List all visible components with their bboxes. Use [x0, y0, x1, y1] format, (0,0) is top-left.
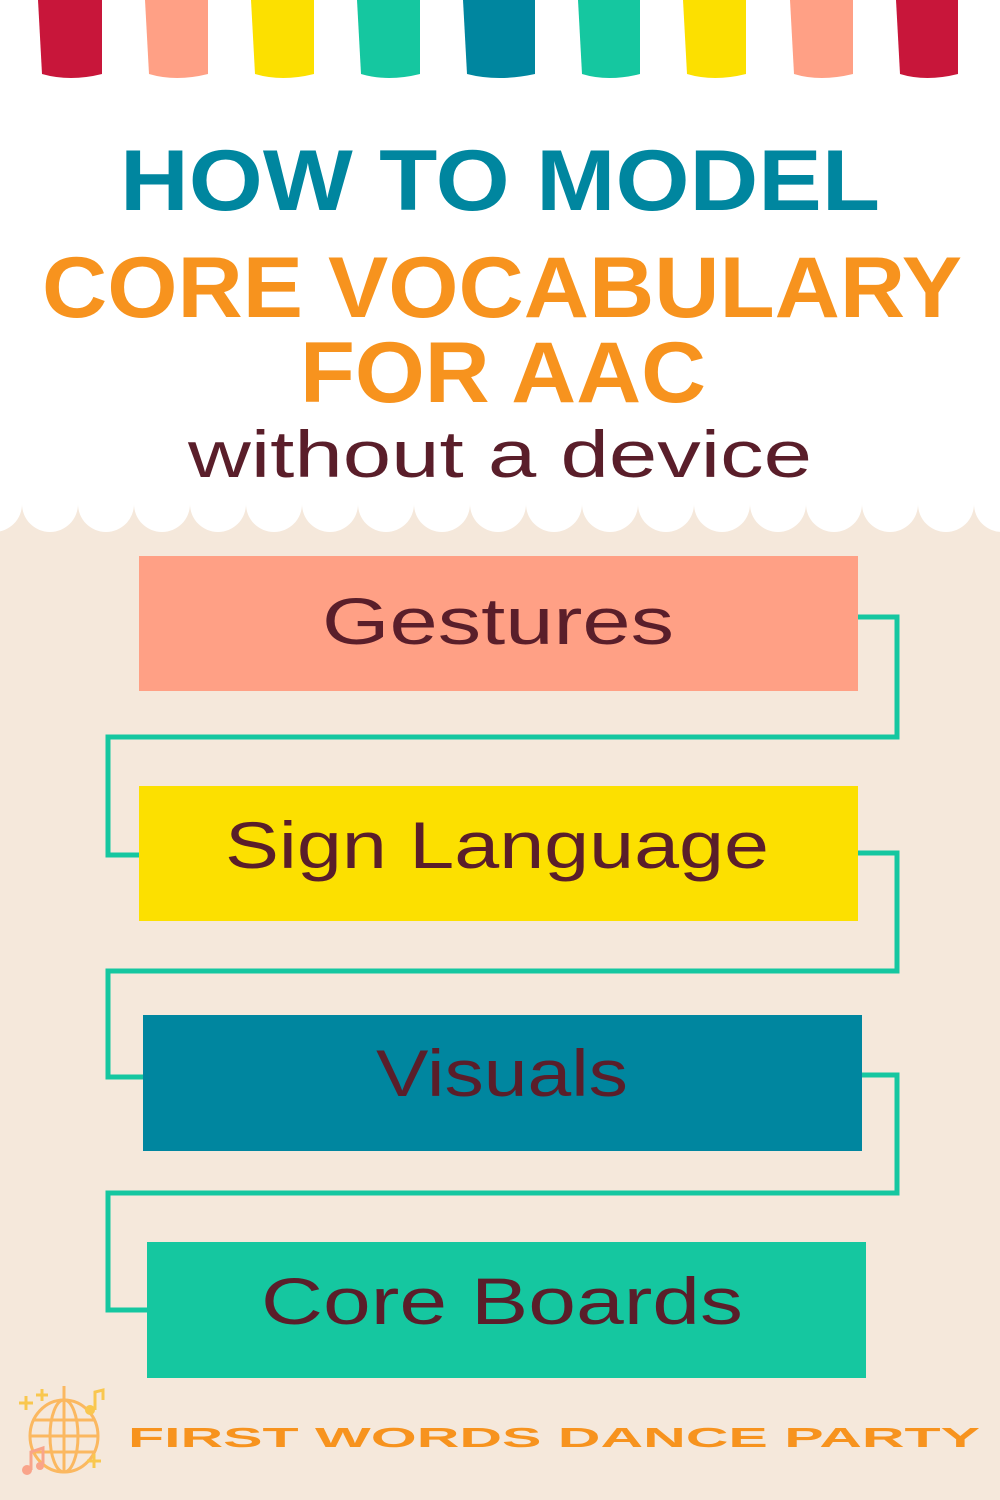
- box: Gestures: Gestures: [322, 584, 674, 658]
- title: FOR AAC: [300, 325, 706, 421]
- box: Visuals: Visuals: [376, 1036, 628, 1110]
- box: Sign Language: [139, 786, 858, 921]
- title: [42, 133, 962, 421]
- bunting: [38, 0, 958, 78]
- connectors: [108, 617, 897, 1310]
- box: Sign Language: Sign Language: [225, 808, 769, 882]
- title: HOW TO MODEL: [120, 133, 880, 229]
- title: CORE VOCABULARY: [42, 240, 962, 336]
- box: Gestures: [139, 556, 858, 691]
- subtitle: without a device: [187, 417, 812, 491]
- box: Core Boards: Core Boards: [261, 1264, 743, 1338]
- box: Visuals: [143, 1015, 862, 1151]
- footer brand text: FIRST WORDS DANCE PARTY: [128, 1422, 981, 1453]
- box: Core Boards: [147, 1242, 866, 1378]
- logo icon: [19, 1386, 103, 1475]
